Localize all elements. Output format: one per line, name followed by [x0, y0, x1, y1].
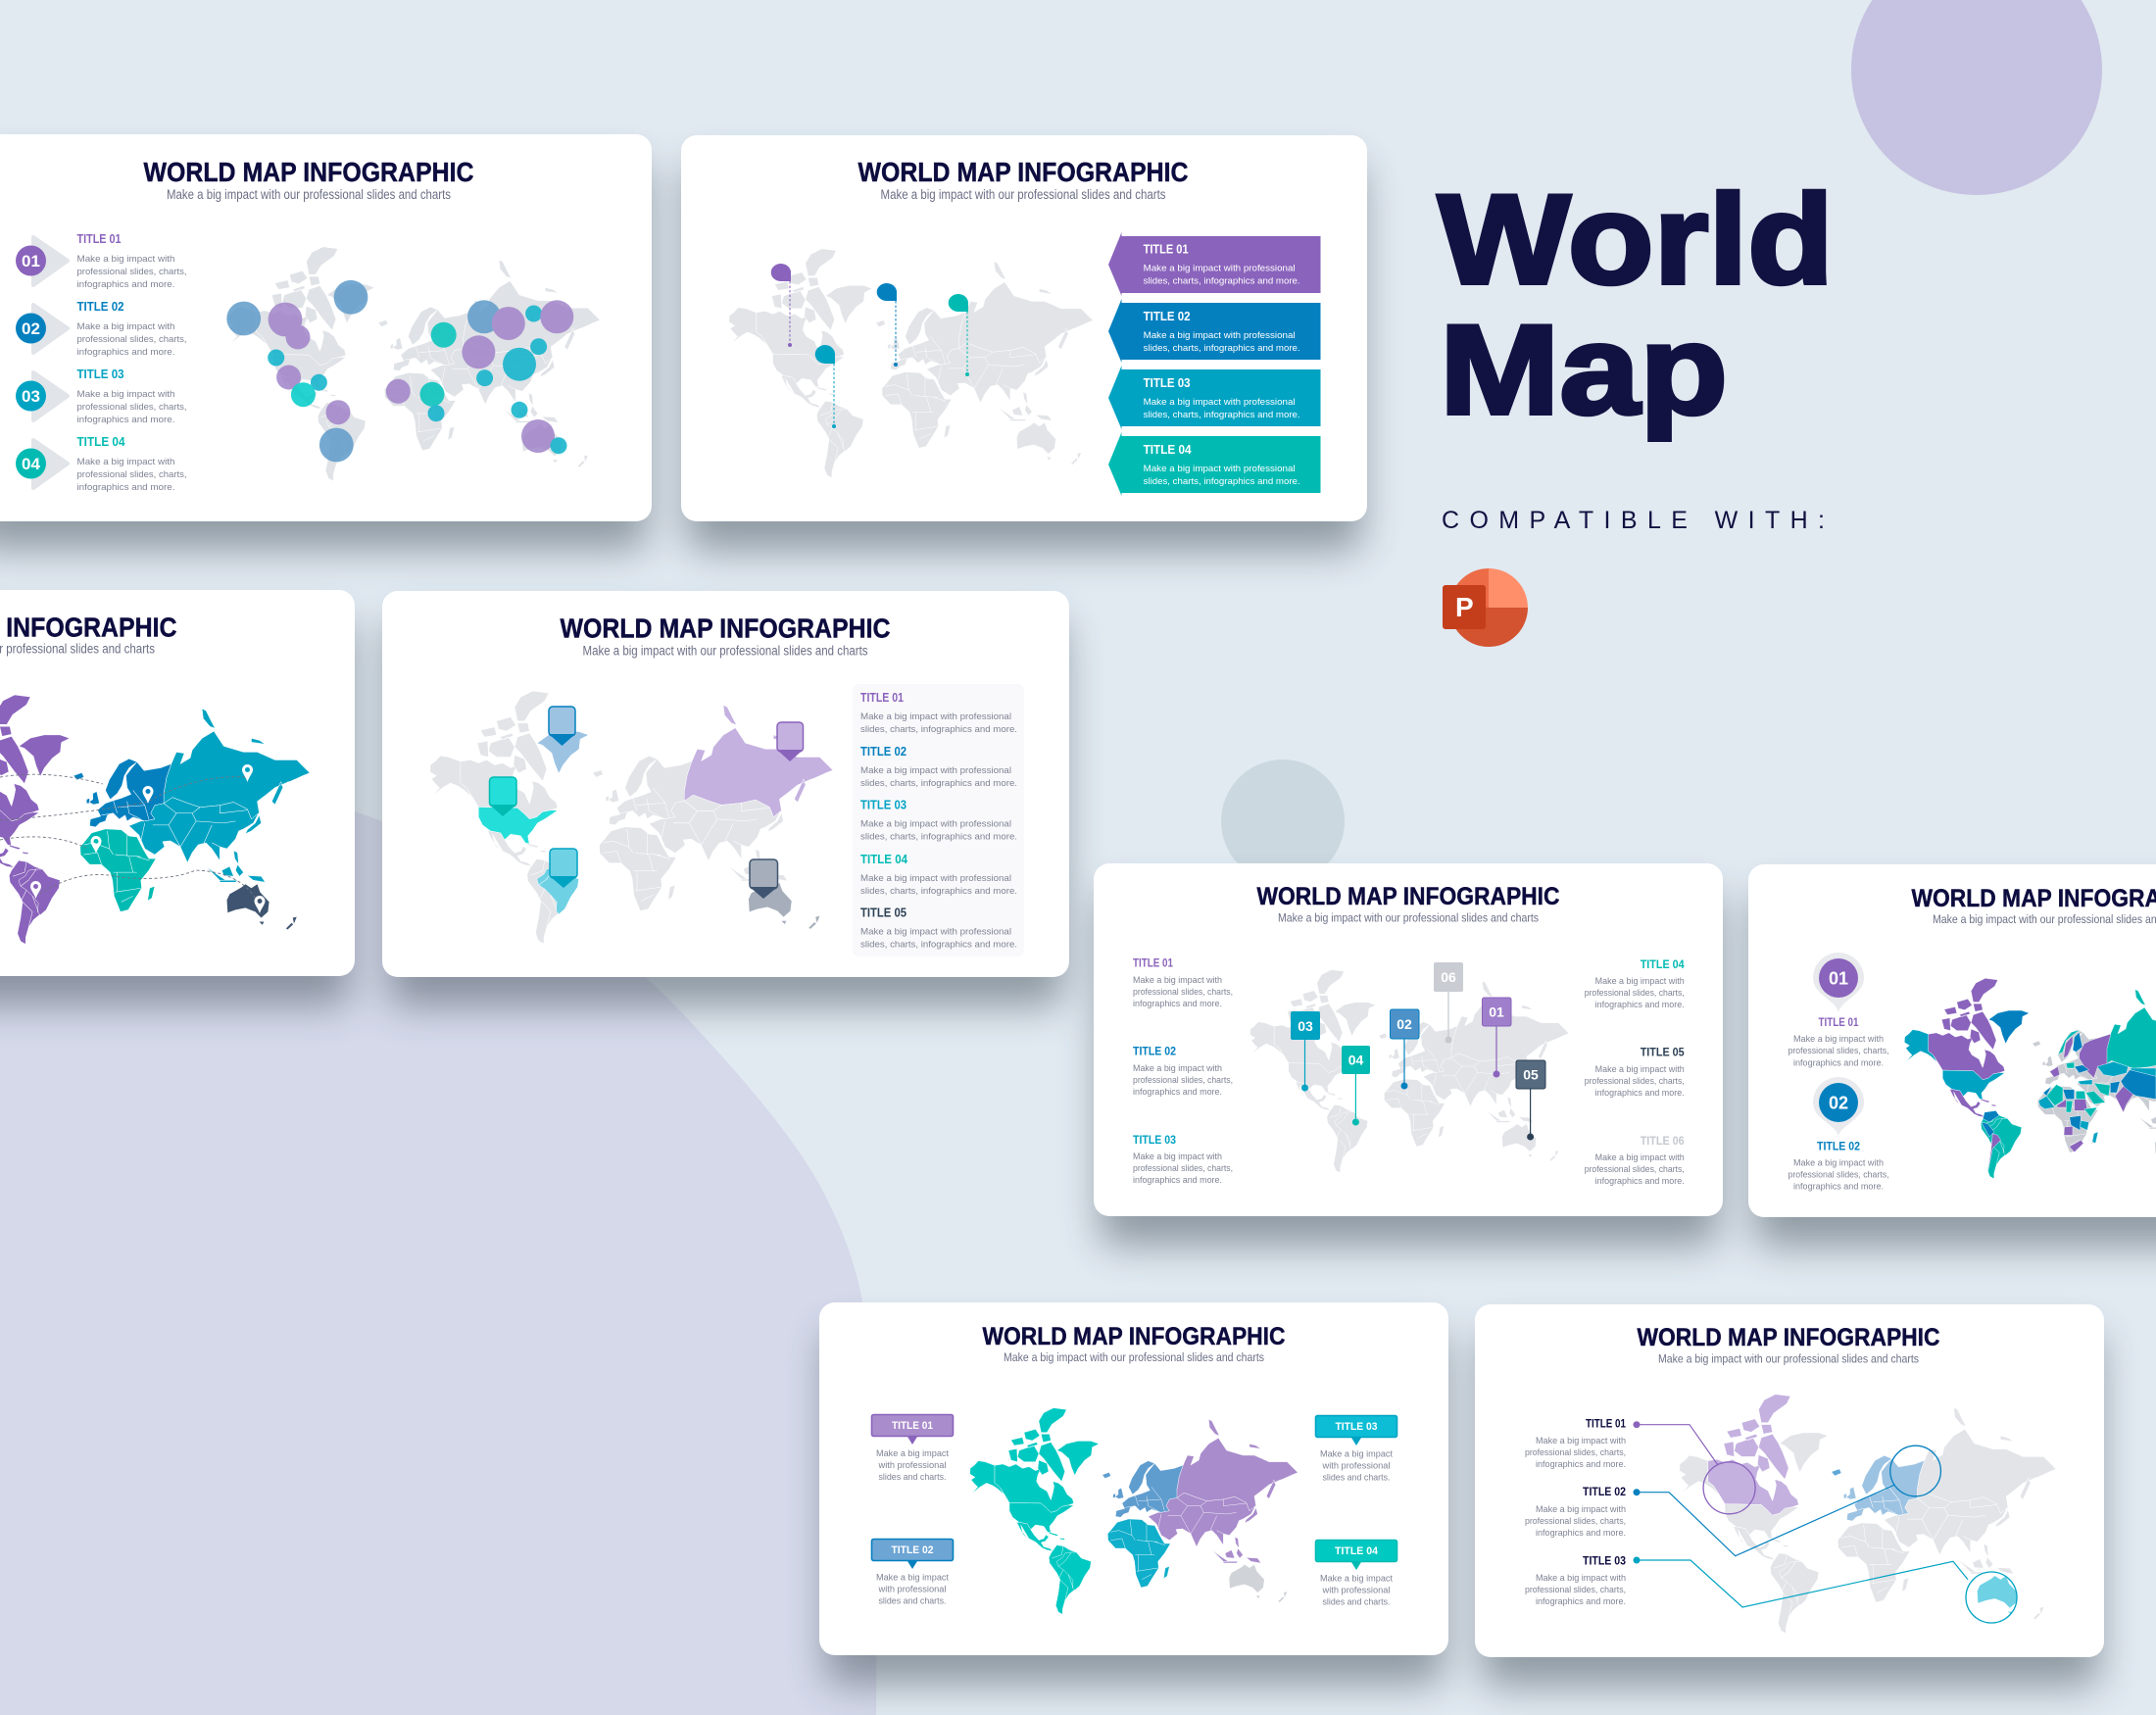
flag 05: 05	[1523, 1066, 1539, 1082]
world map with flags	[1250, 962, 1569, 1173]
ribbon 02: Make a big impact with professional	[1144, 330, 1296, 341]
label 04: TITLE 04	[1335, 1545, 1379, 1557]
item 01: infographics and more.	[76, 279, 174, 290]
list item 01	[860, 691, 1017, 735]
world map with highlighted countries	[430, 691, 833, 944]
flag 04	[1342, 1046, 1370, 1125]
callout 03: professional slides, charts,	[1525, 1585, 1626, 1594]
pin turquoise	[490, 777, 516, 816]
callout 03	[1525, 1556, 2017, 1623]
item 02: TITLE 02	[76, 300, 124, 314]
label 01: TITLE 01	[892, 1420, 933, 1432]
left text column: TITLE 01	[1133, 958, 1174, 970]
marker 01 with text: professional slides, charts,	[1788, 1046, 1889, 1055]
item 01: Make a big impact with	[76, 254, 174, 265]
list item 01: slides, charts, infographics and more.	[860, 724, 1017, 735]
list item 04: TITLE 04	[860, 853, 907, 866]
item 04: TITLE 04	[76, 435, 125, 449]
panel: slide F multicolour countries	[1748, 864, 2156, 1217]
callout 03: Make a big impact with	[1536, 1573, 1626, 1583]
ribbon 04: slides, charts, infographics and more.	[1144, 476, 1300, 487]
right text column: professional slides, charts,	[1585, 988, 1685, 998]
right text column: professional slides, charts,	[1585, 1164, 1685, 1174]
item 02: Make a big impact with	[76, 321, 174, 332]
icon: PowerPoint: P	[1455, 592, 1474, 622]
ribbon 04: Make a big impact with professional	[1144, 464, 1296, 474]
slide G subtitle: Make a big impact with our professional slides and charts	[1004, 1350, 1264, 1364]
item 04	[16, 435, 186, 493]
left text column	[1133, 958, 1233, 1185]
item 04: infographics and more.	[76, 482, 174, 493]
item 03: infographics and more.	[76, 415, 174, 425]
pin cyan	[550, 849, 577, 888]
list item 03: TITLE 03	[860, 799, 906, 812]
list item 02: Make a big impact with professional	[860, 765, 1011, 776]
right text column: infographics and more.	[1595, 1176, 1685, 1186]
ribbon 03: TITLE 03	[1144, 375, 1191, 390]
flag 02: 02	[1396, 1016, 1412, 1032]
list item 05	[860, 906, 1017, 951]
list item 05: TITLE 05	[860, 906, 906, 920]
label 04: Make a big impact	[1320, 1573, 1394, 1583]
title: World Map	[1438, 168, 1834, 441]
callout 01	[1525, 1419, 1755, 1514]
panel: main heading and compatibility	[1438, 168, 1834, 647]
marker 01 with text: infographics and more.	[1793, 1058, 1884, 1068]
callout 02: infographics and more.	[1536, 1528, 1626, 1538]
right text column	[1585, 959, 1685, 1186]
ribbon 02: TITLE 02	[1144, 309, 1191, 323]
panel: slide G speech labels	[819, 1302, 1448, 1655]
ribbon 04: TITLE 04	[1144, 442, 1192, 457]
item 03: 03	[22, 387, 40, 406]
callout 02: professional slides, charts,	[1525, 1516, 1626, 1526]
ribbon 03: Make a big impact with professional	[1144, 397, 1296, 408]
side list panel	[853, 684, 1024, 956]
left text column: Make a big impact with	[1133, 1152, 1222, 1161]
marker 02 with text: Make a big impact with	[1793, 1158, 1884, 1168]
multicolour world map	[1904, 978, 2156, 1179]
world map with highlighted regions	[1680, 1395, 2056, 1634]
item 03	[16, 368, 186, 425]
list item 02: TITLE 02	[860, 745, 906, 759]
label 03	[1315, 1415, 1397, 1483]
left text column: professional slides, charts,	[1133, 1075, 1233, 1085]
list item 03	[860, 799, 1017, 843]
item 03: Make a big impact with	[76, 389, 174, 400]
flag 01	[1482, 998, 1511, 1078]
small grey-blue background circle	[1221, 760, 1345, 883]
slide D subtitle: Make a big impact with our professional slides and charts	[582, 644, 868, 659]
slide A numbered list	[16, 232, 186, 493]
callout 01: infographics and more.	[1536, 1459, 1626, 1469]
item 02	[16, 300, 186, 358]
ribbon 02: slides, charts, infographics and more.	[1144, 343, 1300, 354]
large lavender background shape	[0, 762, 876, 1715]
panel: slide B ribbons and pins	[681, 135, 1367, 521]
left text column: professional slides, charts,	[1133, 1163, 1233, 1173]
callout 03: infographics and more.	[1536, 1596, 1626, 1606]
item 02: professional slides, charts,	[76, 334, 186, 345]
coloured continents map	[970, 1408, 1298, 1614]
left text column: TITLE 03	[1133, 1135, 1176, 1147]
right text column: TITLE 06	[1641, 1136, 1685, 1148]
ribbon 01: TITLE 01	[1144, 242, 1189, 257]
slide E subtitle: Make a big impact with our professional slides and charts	[1278, 911, 1539, 925]
left text column: infographics and more.	[1133, 999, 1222, 1008]
label 01: with professional	[877, 1460, 947, 1470]
compatible with label: COMPATIBLE WITH:	[1442, 507, 1825, 534]
label 02: TITLE 02	[892, 1544, 933, 1556]
continents map with routes and pins	[0, 695, 310, 944]
right text column: infographics and more.	[1595, 1088, 1685, 1098]
label 03: with professional	[1321, 1461, 1391, 1471]
slide H heading: WORLD MAP INFOGRAPHIC	[1637, 1324, 1940, 1351]
slide G heading: WORLD MAP INFOGRAPHIC	[982, 1323, 1286, 1350]
flag 03: 03	[1298, 1018, 1313, 1034]
item 02: infographics and more.	[76, 347, 174, 358]
marker 01 with text: Make a big impact with	[1793, 1034, 1884, 1044]
label 01: slides and charts.	[878, 1472, 947, 1482]
marker 02 with text: 02	[1829, 1094, 1848, 1113]
item 02: 02	[22, 319, 40, 338]
marker 01 with text: TITLE 01	[1819, 1017, 1859, 1029]
marker 02 with text	[1788, 1077, 1889, 1192]
item 01: professional slides, charts,	[76, 267, 186, 277]
list item 02	[860, 745, 1017, 789]
icon: PowerPoint	[1443, 568, 1528, 647]
right text column: infographics and more.	[1595, 1000, 1685, 1009]
left text column: professional slides, charts,	[1133, 987, 1233, 997]
world map with bubbles	[226, 247, 600, 481]
callout 01: Make a big impact with	[1536, 1436, 1626, 1446]
label 04: slides and charts.	[1323, 1596, 1390, 1606]
list item 02: slides, charts, infographics and more.	[860, 778, 1017, 789]
list item 01: Make a big impact with professional	[860, 711, 1011, 722]
left text column: TITLE 02	[1133, 1047, 1176, 1058]
slide E heading: WORLD MAP INFOGRAPHIC	[1256, 883, 1560, 910]
ribbon 03: slides, charts, infographics and more.	[1144, 410, 1300, 420]
left text column: infographics and more.	[1133, 1175, 1222, 1185]
label 01	[872, 1415, 953, 1482]
pin purple	[777, 722, 804, 761]
label 04	[1315, 1541, 1397, 1606]
label 02: slides and charts.	[878, 1596, 947, 1606]
panel: slide D pinned countries	[382, 591, 1069, 977]
list item 04: Make a big impact with professional	[860, 873, 1011, 884]
panel: slide A bubble map	[0, 134, 652, 521]
marker 01 with text: 01	[1829, 968, 1848, 988]
label 04: with professional	[1321, 1585, 1391, 1594]
left text column: Make a big impact with	[1133, 1063, 1222, 1073]
flag 02	[1390, 1009, 1419, 1090]
item 03: professional slides, charts,	[76, 402, 186, 413]
list item 01: TITLE 01	[860, 691, 904, 705]
label 02	[872, 1539, 953, 1606]
item 01: TITLE 01	[76, 232, 122, 246]
callout 03: TITLE 03	[1583, 1556, 1626, 1568]
slide A subtitle: Make a big impact with our professional slides and charts	[167, 187, 451, 202]
label 02: with professional	[877, 1585, 947, 1594]
slide H subtitle: Make a big impact with our professional slides and charts	[1658, 1352, 1919, 1366]
marker 02 with text: TITLE 02	[1817, 1142, 1860, 1153]
list item 04: slides, charts, infographics and more.	[860, 886, 1017, 897]
callout 02: TITLE 02	[1583, 1487, 1626, 1498]
label 03: Make a big impact	[1320, 1449, 1394, 1459]
panel: slide E numbered flags	[1094, 863, 1723, 1216]
slide A heading: WORLD MAP INFOGRAPHIC	[143, 157, 474, 187]
panel: slide H callout circles	[1475, 1304, 2104, 1657]
flag 06: 06	[1441, 969, 1456, 985]
flag 01: 01	[1489, 1004, 1504, 1019]
right text column: Make a big impact with	[1595, 1152, 1685, 1162]
callout 02: Make a big impact with	[1536, 1504, 1626, 1514]
callout 02	[1525, 1446, 1940, 1556]
slide B subtitle: Make a big impact with our professional slides and charts	[880, 187, 1166, 202]
item 04: 04	[22, 455, 40, 473]
item 04: professional slides, charts,	[76, 469, 186, 480]
lilac circle top right	[1851, 0, 2102, 195]
list item 05: slides, charts, infographics and more.	[860, 940, 1017, 951]
callout 01: professional slides, charts,	[1525, 1447, 1626, 1457]
pin blue	[549, 707, 575, 746]
ribbon 01	[1108, 232, 1321, 296]
pin slate	[750, 859, 778, 899]
left text column: infographics and more.	[1133, 1087, 1222, 1097]
flag 03	[1291, 1011, 1320, 1092]
marker 02 with text: infographics and more.	[1793, 1182, 1884, 1192]
slide D heading: WORLD MAP INFOGRAPHIC	[561, 613, 891, 644]
slide B heading: WORLD MAP INFOGRAPHIC	[858, 157, 1189, 187]
item 01	[16, 232, 186, 290]
label 03: slides and charts.	[1323, 1473, 1390, 1483]
ribbon 01: Make a big impact with professional	[1144, 264, 1296, 274]
marker 01 with text	[1788, 953, 1889, 1068]
list item 05: Make a big impact with professional	[860, 927, 1011, 938]
right text column: Make a big impact with	[1595, 976, 1685, 986]
flag 06	[1434, 962, 1463, 1043]
ribbon 04	[1108, 432, 1321, 496]
right text column: TITLE 05	[1641, 1048, 1685, 1059]
ribbon 01: slides, charts, infographics and more.	[1144, 276, 1300, 287]
flag 05	[1516, 1060, 1545, 1141]
label 01: Make a big impact	[876, 1448, 950, 1458]
title: World Map: World	[1438, 168, 1834, 311]
item 03: TITLE 03	[76, 368, 124, 381]
right text column: TITLE 04	[1641, 959, 1685, 971]
list item 03: slides, charts, infographics and more.	[860, 832, 1017, 843]
panel: slide C coloured continents	[0, 590, 355, 976]
left text column: Make a big impact with	[1133, 975, 1222, 985]
label 03: TITLE 03	[1335, 1421, 1378, 1433]
list item 04	[860, 853, 1017, 897]
label 02: Make a big impact	[876, 1573, 950, 1583]
ribbon 02	[1108, 299, 1321, 363]
ribbon 03	[1108, 366, 1321, 429]
item 01: 01	[22, 252, 40, 270]
right text column: Make a big impact with	[1595, 1064, 1685, 1074]
list item 03: Make a big impact with professional	[860, 819, 1011, 830]
flag 04: 04	[1348, 1053, 1363, 1068]
marker 02 with text: professional slides, charts,	[1788, 1170, 1889, 1180]
callout 01: TITLE 01	[1586, 1419, 1627, 1431]
world map with drop pins	[729, 249, 1093, 478]
title: World Map: Map	[1440, 298, 1728, 441]
item 04: Make a big impact with	[76, 457, 174, 467]
right text column: professional slides, charts,	[1585, 1076, 1685, 1086]
